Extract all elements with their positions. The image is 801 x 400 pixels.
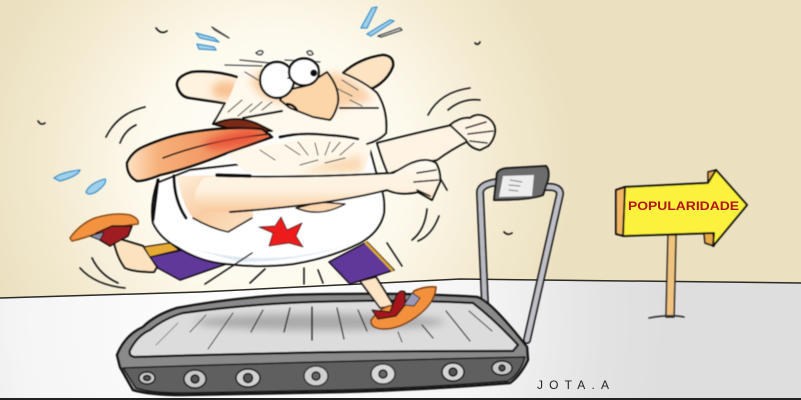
front shoe — [371, 287, 436, 329]
right eye — [289, 58, 319, 86]
treadmill belt — [130, 301, 518, 357]
shorts back — [144, 243, 226, 280]
belt shadow — [195, 314, 445, 330]
far arm — [377, 115, 495, 174]
peach around eye and brow — [250, 70, 372, 108]
treadmill base — [123, 357, 525, 393]
treadmill uprights — [480, 182, 560, 340]
nose — [280, 72, 338, 120]
arrow back side — [616, 187, 625, 236]
right ear — [343, 55, 393, 90]
treadmill frame — [117, 294, 528, 395]
direction sign — [616, 170, 747, 318]
singlet shading — [190, 244, 350, 262]
treadmill — [117, 166, 560, 395]
front leg — [360, 277, 394, 308]
near arm — [194, 160, 440, 212]
left ear shade — [212, 81, 240, 99]
lower belly fold — [296, 202, 345, 212]
left eye — [260, 62, 294, 98]
beard strokes — [228, 80, 362, 116]
rollers — [139, 361, 512, 388]
nostril — [287, 104, 297, 110]
left ear — [177, 72, 240, 104]
sign label: POPULARIDADE — [628, 201, 739, 213]
sweat drops — [54, 7, 402, 194]
bottom edge — [0, 398, 801, 400]
belly edge — [193, 218, 252, 232]
chest shadow — [300, 155, 362, 172]
motion lines — [38, 28, 512, 288]
pupils — [288, 70, 317, 78]
arrow depth — [704, 170, 716, 246]
floor — [0, 279, 801, 400]
arrow — [623, 170, 747, 246]
back leg — [113, 237, 157, 272]
chest hair — [260, 140, 355, 165]
shorts front — [329, 242, 394, 284]
belly flesh — [177, 175, 254, 232]
chest — [225, 128, 371, 176]
strap lines — [153, 176, 186, 220]
tongue red patch — [203, 127, 261, 153]
belt lines — [156, 307, 492, 349]
head — [127, 51, 393, 181]
background wall — [0, 0, 801, 300]
artist signature: JOTA.A — [537, 378, 609, 392]
face — [213, 65, 387, 143]
tongue — [127, 128, 272, 181]
treadmill console — [494, 166, 549, 200]
torso singlet — [152, 150, 384, 266]
sign post — [666, 235, 676, 317]
flying sweat bits — [256, 51, 313, 55]
upper lip — [243, 111, 282, 118]
face outlines — [213, 73, 386, 144]
mouth — [214, 119, 272, 132]
hair strokes — [225, 60, 320, 80]
post ground shadow — [649, 316, 684, 318]
tongue groove — [163, 134, 270, 158]
star emblem — [259, 217, 303, 247]
back shoe — [70, 214, 138, 246]
teeth — [280, 134, 358, 139]
